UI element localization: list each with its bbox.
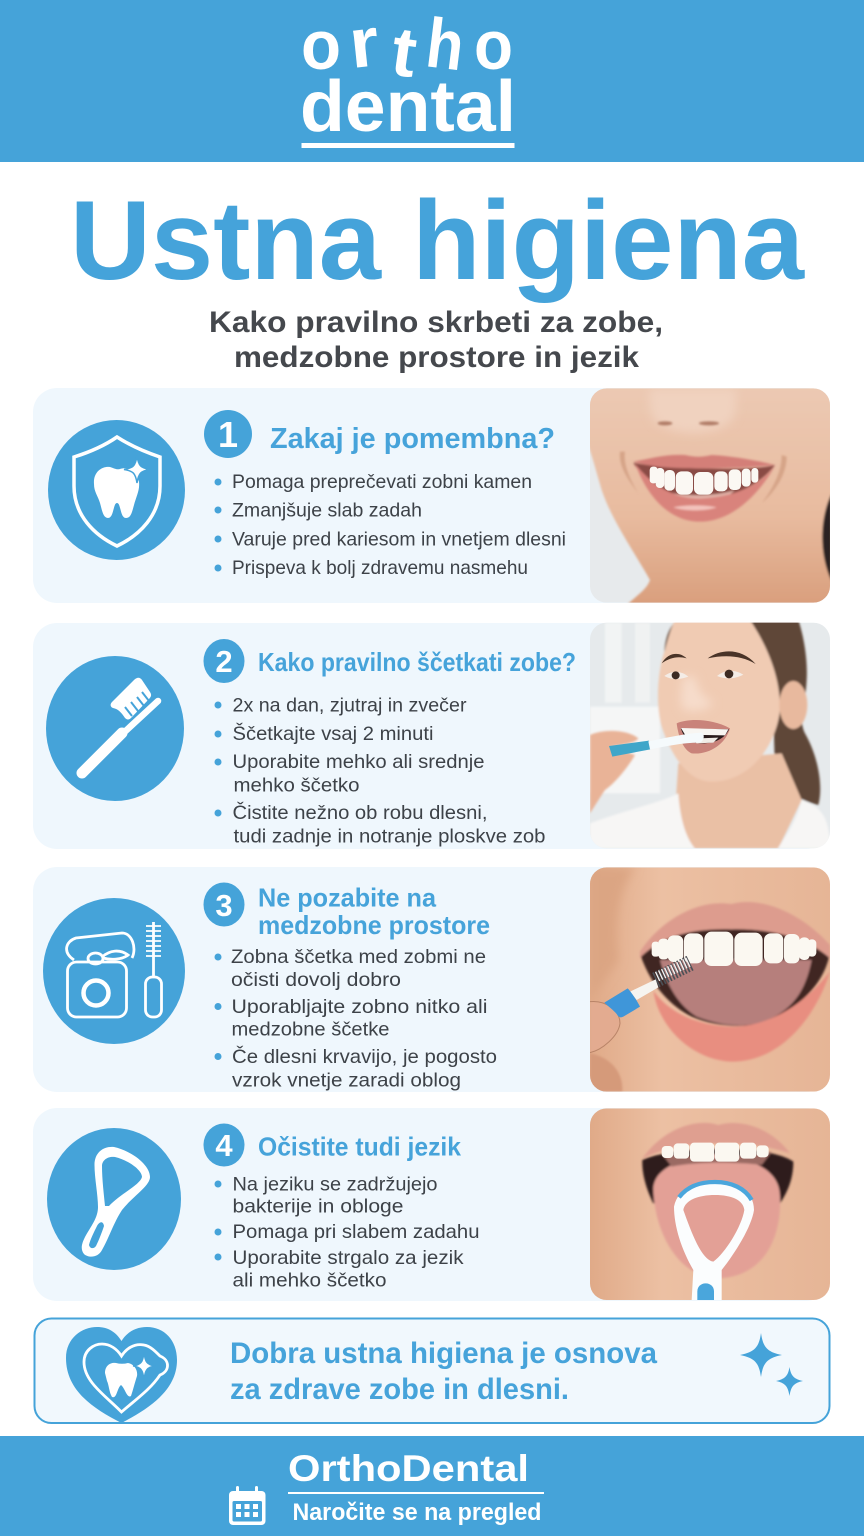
panel 4: jezik <box>33 1108 830 1310</box>
logo: ortho dental <box>300 2 516 148</box>
heading 4: Očistite tudi jezik <box>258 1132 462 1162</box>
logo: ortho dental: h <box>422 3 468 85</box>
list 3 <box>214 946 497 1092</box>
number 2: 2 <box>215 644 233 679</box>
list 2: Čistite nežno ob robu dlesni, <box>232 801 488 824</box>
list 3: Zobna ščetka med zobmi ne <box>231 946 486 968</box>
list 4: Na jeziku se zadržujejo <box>232 1174 438 1196</box>
icon: shield with tooth <box>48 420 185 560</box>
list 1: Zmanjšuje slab zadah <box>232 500 422 522</box>
number 3: 3 <box>215 888 233 923</box>
footer brand: OrthoDental <box>288 1448 529 1489</box>
logo: ortho dental: o <box>301 6 341 84</box>
list 3: očisti dovolj dobro <box>231 969 401 991</box>
logo: ortho dental: t <box>387 12 422 92</box>
icon: tongue scraper <box>47 1128 181 1270</box>
number 4 <box>204 1124 244 1166</box>
header band <box>0 0 864 162</box>
list 2: mehko ščetko <box>234 774 360 796</box>
list 4: Pomaga pri slabem zadahu <box>232 1221 480 1243</box>
subtitle: Kako pravilno skrbeti za zobe, <box>209 306 663 339</box>
list 4: Uporabite strgalo za jezik <box>232 1247 464 1269</box>
icon: heart with tooth <box>66 1327 177 1423</box>
logo: ortho dental: r <box>345 2 382 83</box>
number 2 <box>204 639 244 683</box>
photo: interdental brush in mouth <box>590 867 830 1092</box>
list 3: Uporabljajte zobno nitko ali <box>232 996 488 1018</box>
callout banner <box>34 1318 830 1423</box>
logo: ortho dental: o <box>474 6 513 84</box>
list 2: Ščetkajte vsaj 2 minuti <box>232 722 434 745</box>
photo: woman brushing teeth <box>590 620 830 848</box>
panel 2: scetkanje <box>33 620 830 849</box>
heading 1: Zakaj je pomembna? <box>270 423 555 455</box>
list 1: Pomaga preprečevati zobni kamen <box>232 471 532 493</box>
list 4 <box>214 1174 480 1292</box>
subtitle: medzobne prostore in jezik <box>234 341 639 374</box>
icon: toothbrush <box>46 656 184 801</box>
list 4: ali mehko ščetko <box>232 1270 387 1292</box>
callout text: Dobra ustna higiena je osnova <box>230 1337 657 1370</box>
list 4: bakterije in obloge <box>232 1196 404 1218</box>
title: Ustna higiena <box>70 178 805 303</box>
list 1: Varuje pred kariesom in vnetjem dlesni <box>232 528 566 550</box>
heading 3: medzobne prostore <box>258 910 490 940</box>
photo: tongue scraper on tongue <box>590 1108 830 1310</box>
number 4: 4 <box>215 1128 233 1163</box>
logo: ortho dental: dental <box>300 67 516 147</box>
heading 3: Ne pozabite na <box>258 882 437 912</box>
icon: calendar <box>229 1486 266 1525</box>
heading 2: Kako pravilno ščetkati zobe? <box>258 647 576 677</box>
list 3: vzrok vnetje zaradi oblog <box>232 1070 461 1092</box>
icon: floss and interdental brush <box>43 898 185 1044</box>
photo: smile <box>585 380 835 607</box>
list 1 <box>214 471 566 579</box>
list 3: medzobne ščetke <box>232 1018 390 1040</box>
callout text: za zdrave zobe in dlesni. <box>230 1373 569 1406</box>
footer band <box>0 1436 864 1536</box>
list 2: tudi zadnje in notranje ploskve zob <box>234 826 546 848</box>
heading 3 <box>258 882 490 940</box>
number 3 <box>204 882 244 926</box>
number 1 <box>204 410 252 458</box>
list 2: Uporabite mehko ali srednje <box>232 751 484 773</box>
list 3: Če dlesni krvavijo, je pogosto <box>232 1045 497 1068</box>
icon: sparkles <box>740 1333 803 1396</box>
footer call to action: Naročite se na pregled <box>292 1499 542 1526</box>
panel 3: medzobni prostori <box>33 867 830 1092</box>
subtitle <box>209 306 663 374</box>
panel 1: zakaj je pomembna <box>33 380 835 607</box>
list 1: Prispeva k bolj zdravemu nasmehu <box>232 557 528 579</box>
list 2 <box>214 694 546 848</box>
callout text <box>230 1337 657 1406</box>
number 1: 1 <box>218 414 238 455</box>
list 2: 2x na dan, zjutraj in zvečer <box>232 694 467 716</box>
